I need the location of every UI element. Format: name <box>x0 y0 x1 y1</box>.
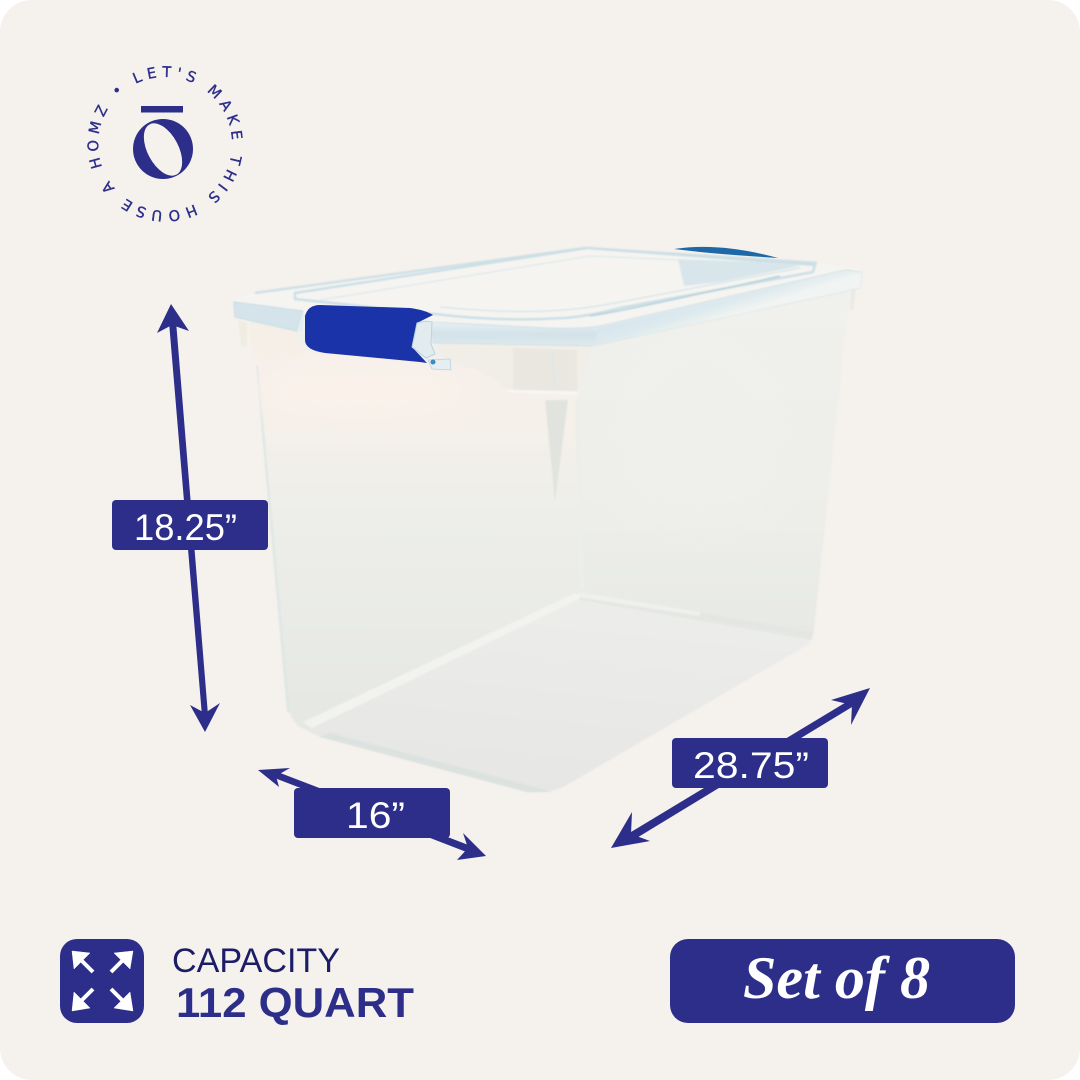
capacity icon <box>60 939 144 1023</box>
width arrow <box>258 768 486 860</box>
depth label <box>672 738 828 788</box>
height label: 18.25” <box>134 507 237 548</box>
width label: 16” <box>346 795 405 836</box>
width label <box>294 788 450 838</box>
front and right rim <box>430 270 862 346</box>
depth arrow <box>611 688 870 848</box>
front ledge <box>433 343 592 393</box>
product: clear storage bin <box>234 247 862 792</box>
logo circular slogan: LET'S MAKE THIS HOUSE A HOMZ • <box>87 66 243 222</box>
depth label: 28.75” <box>693 745 809 786</box>
set of 8 badge: Set of 8 <box>743 945 930 1011</box>
height label <box>112 500 268 550</box>
logo: circular badge <box>87 66 243 222</box>
bin body <box>250 289 850 792</box>
logo letter o <box>133 117 193 182</box>
capacity value: 112 QUART <box>176 979 414 1026</box>
height arrow <box>157 304 220 732</box>
left rim <box>234 302 303 331</box>
set of 8 badge <box>670 939 1015 1023</box>
bin lid <box>234 248 862 393</box>
blue front latch <box>297 305 451 370</box>
capacity label: CAPACITY <box>172 942 340 980</box>
left ledge <box>250 323 305 363</box>
back latch <box>674 247 778 258</box>
logo bar <box>141 106 183 112</box>
